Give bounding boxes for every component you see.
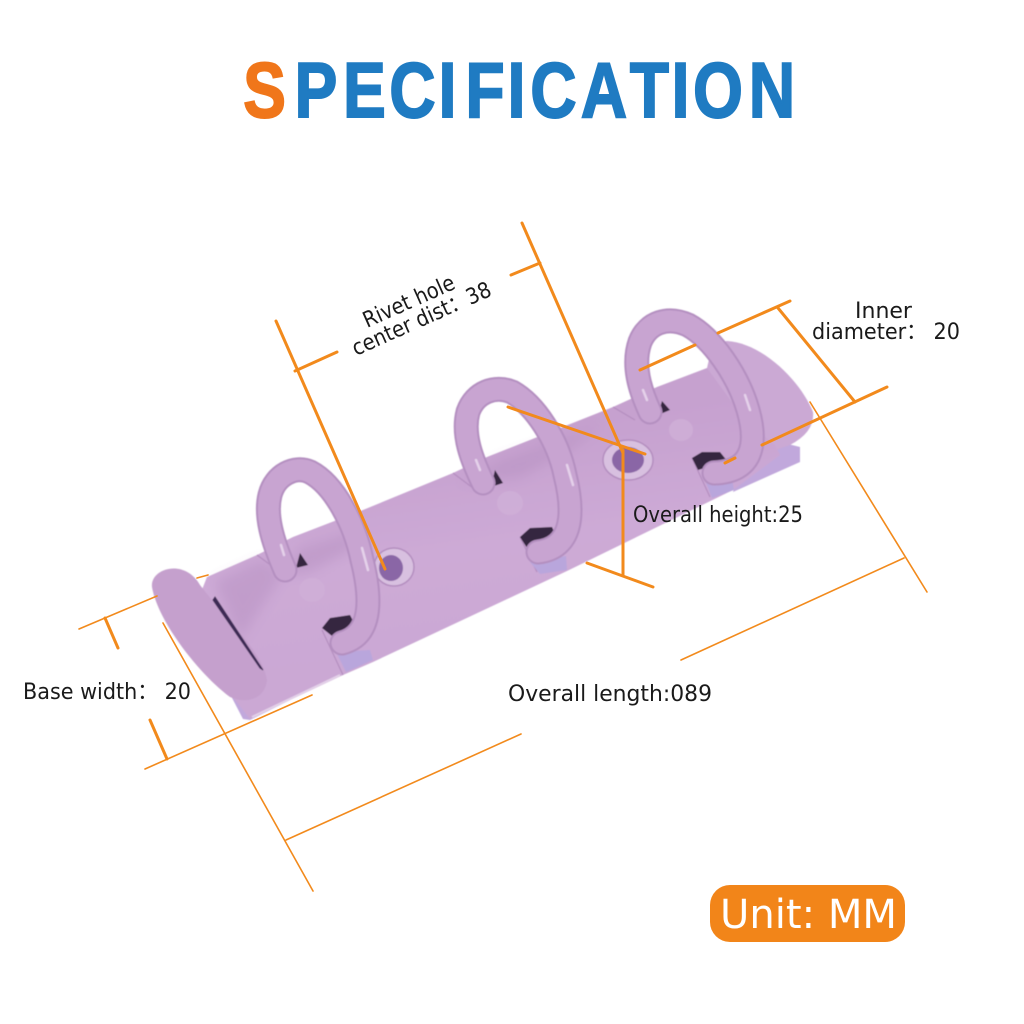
label: rivet hole center distance: center dist：38 (348, 278, 495, 361)
ring 3 (637, 321, 752, 473)
product photo: binder ring mechanism (152, 321, 813, 720)
rivet hole left (374, 548, 414, 586)
dimension: inner diameter (640, 301, 887, 463)
label: inner diameter (812, 299, 960, 345)
shaded section near left ring (215, 530, 360, 640)
end slit (213, 597, 263, 670)
right end dome (707, 341, 813, 462)
rivet hole right (603, 440, 653, 480)
slots (296, 401, 728, 636)
label: base width: Base width： 20 (23, 680, 191, 705)
ring 1 (268, 470, 368, 643)
section edges (257, 407, 710, 675)
dimension: overall length (163, 402, 927, 891)
left end dome (152, 568, 267, 700)
label: inner diameter: Inner (855, 299, 913, 324)
underside gaps (336, 478, 734, 672)
unit badge: Unit: MM (720, 892, 897, 938)
corner and right tab underside (230, 440, 800, 720)
title: SPECIFICATION (243, 47, 795, 134)
dimension: overall height (508, 407, 653, 587)
main plate (190, 368, 780, 719)
label: overall height: Overall height:25 (633, 503, 803, 528)
dimension: rivet hole center distance (276, 223, 623, 569)
dimension: base width (79, 575, 312, 769)
label: rivet hole center distance: Rivet hole (359, 271, 459, 333)
rivet bumps (299, 419, 693, 602)
bottom bevel highlight (252, 675, 340, 717)
shaded section near middle ring (460, 425, 600, 482)
label: inner diameter: diameter： 20 (812, 320, 960, 345)
ring 2 (466, 389, 573, 552)
label: overall length: Overall length:089 (508, 682, 712, 707)
